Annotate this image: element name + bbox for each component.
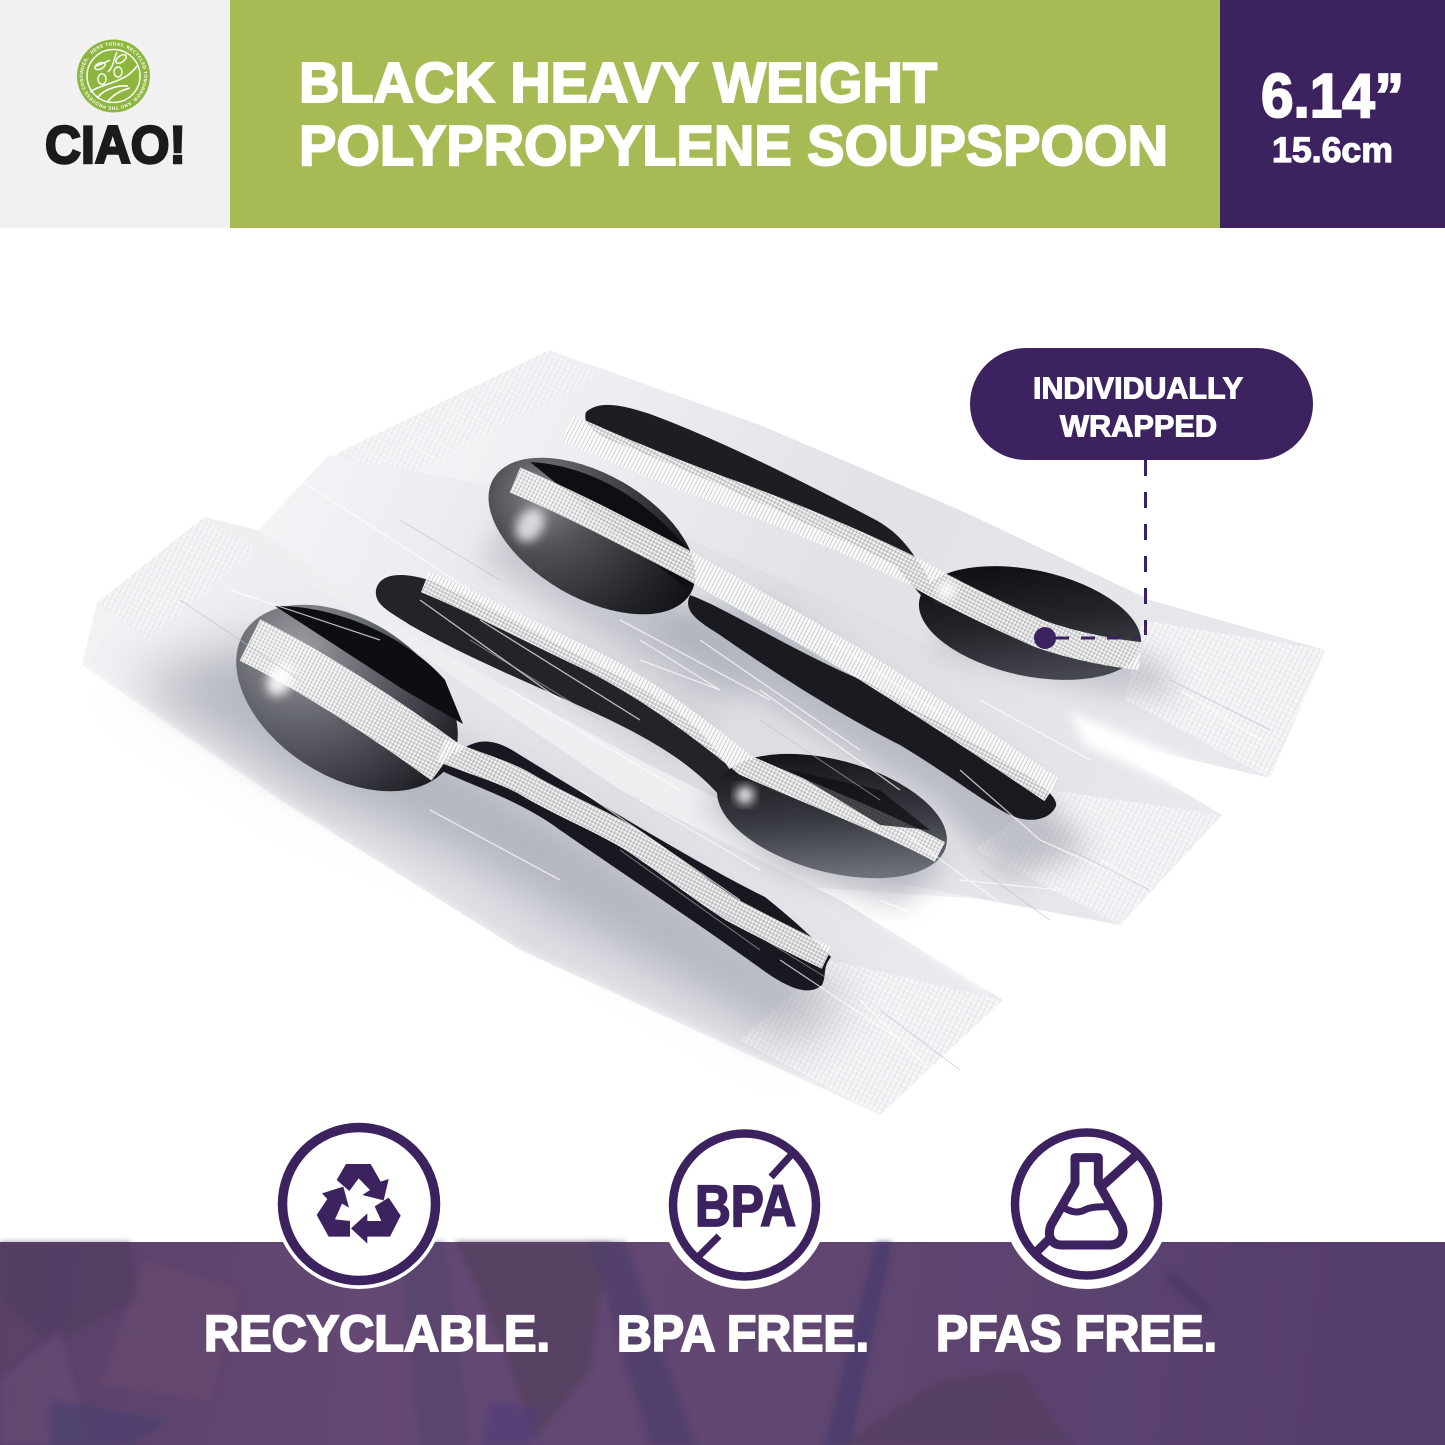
benefit labels: BPA FREE.: [617, 1305, 869, 1362]
callout pill: [970, 348, 1313, 460]
title: BLACK HEAVY WEIGHT: [299, 51, 937, 115]
callout target dot: [1034, 627, 1056, 649]
plastic crinkle highlights: [230, 480, 1260, 1080]
icon: BPA free: BPA: [695, 1174, 796, 1239]
wrapper: middle spoon: [258, 455, 1222, 925]
footer band: [0, 1242, 1445, 1445]
title: POLYPROPYLENE SOUPSPOON: [299, 114, 1168, 178]
title: [299, 51, 1168, 178]
callout text: [1033, 370, 1243, 444]
icon: Ciao logo seal: HERE TODAY, RECYCLED TOMORROW. AND THE PROCESS CONTINUES.: [80, 42, 148, 110]
spoon: top: [568, 405, 1152, 698]
benefit labels: PFAS FREE.: [936, 1305, 1217, 1362]
lower edge fade: [60, 665, 880, 1130]
callout text: WRAPPED: [1060, 408, 1217, 444]
spoon: lowest: [202, 566, 831, 990]
icon: BPA free: [660, 1121, 828, 1289]
callout leader line: [1055, 460, 1146, 638]
film base between wrappers: [97, 350, 1100, 900]
gaps between wrappers: [870, 712, 1240, 990]
wrapper: top spoon: [340, 350, 1325, 778]
header: title panel: [230, 0, 1220, 228]
size in inches: 6.14”: [1261, 62, 1404, 131]
product photo: wrapped spoons: [60, 350, 1325, 1130]
benefit labels: [204, 1305, 1217, 1362]
size in centimetres: 15.6cm: [1272, 131, 1393, 170]
soft shadows: [130, 500, 1180, 1045]
icon: recyclable: [274, 1119, 444, 1289]
spoon: second: [462, 425, 1056, 820]
header: size panel: [1220, 0, 1445, 228]
header: logo panel: [0, 0, 230, 228]
logo wordmark: CIAO!: [45, 116, 186, 175]
leaf background shapes: [0, 1242, 1215, 1445]
plastic crinkle shadows: [180, 520, 1270, 1070]
callout: individually wrapped: [970, 348, 1313, 649]
spoon: third: [376, 575, 960, 901]
wrapper: lowest spoon: [82, 517, 1003, 1115]
callout text: INDIVIDUALLY: [1033, 370, 1243, 406]
benefit labels: RECYCLABLE.: [204, 1305, 550, 1362]
icon: PFAS free: [1002, 1121, 1170, 1289]
